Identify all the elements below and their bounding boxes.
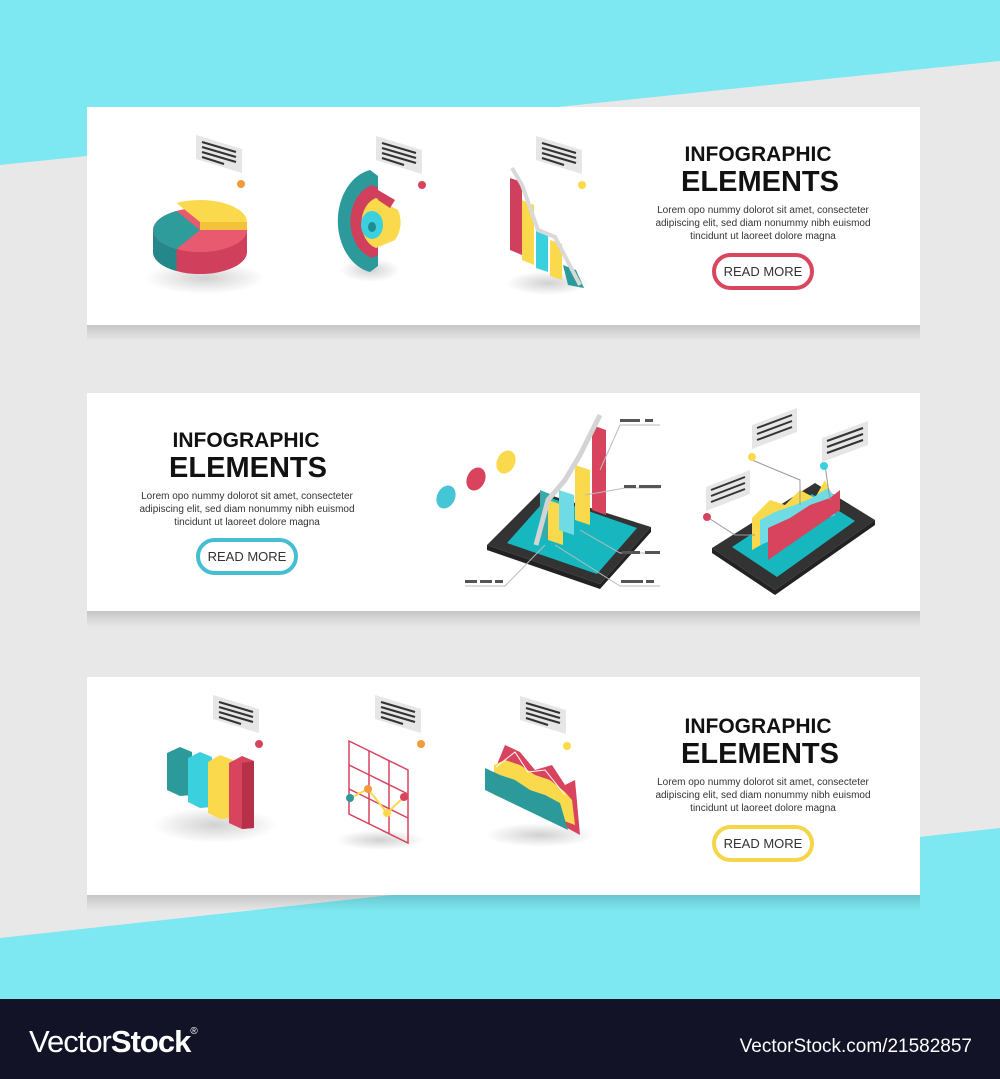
icon: note tablet left (706, 470, 750, 511)
chart: tablet with bar chart (465, 415, 661, 589)
icon: note 2 (376, 136, 422, 174)
text block 1 (655, 205, 871, 242)
title: infographic elements 2: ELEMENTS (169, 452, 327, 484)
title: infographic elements 3: ELEMENTS (681, 738, 839, 770)
text block 3: adipiscing elit, sed diam nonummy nibh euismod (655, 790, 871, 801)
title: infographic elements 2: INFOGRAPHIC (172, 429, 320, 452)
text block 1: tincidunt ut laoreet dolore magna (690, 231, 836, 242)
button: read more yellow: READ MORE (724, 836, 803, 851)
icon: note tablet right (822, 421, 868, 462)
icon: note 5 (375, 695, 421, 733)
title: infographic elements 1: INFOGRAPHIC (684, 143, 832, 166)
text block 2: tincidunt ut laoreet dolore magna (174, 517, 320, 528)
icon: concentric arcs (338, 170, 401, 282)
panel: banner 3 (87, 677, 920, 895)
icon: note 4 (213, 695, 259, 733)
text block 2: adipiscing elit, sed diam nonummy nibh euismod (139, 504, 355, 515)
footer logo: ® (190, 1026, 198, 1037)
icon: note 6 (520, 696, 566, 734)
title: infographic elements 3 (681, 715, 839, 770)
text block 3 (655, 777, 871, 814)
button: read more red (714, 255, 812, 288)
icon: 3d bar blocks (153, 747, 277, 843)
text block 1: Lorem opo nummy dolorot sit amet, consecteter (657, 205, 870, 216)
title: infographic elements 1 (681, 143, 839, 198)
text block 1: adipiscing elit, sed diam nonummy nibh euismod (655, 218, 871, 229)
icon: note 1 (196, 135, 242, 173)
button: read more cyan (198, 540, 296, 573)
title: infographic elements 1: ELEMENTS (681, 166, 839, 198)
button: read more yellow (714, 827, 812, 860)
button: read more cyan: READ MORE (208, 549, 287, 564)
chart: grid line chart (335, 741, 425, 850)
icon: note tablet top (752, 408, 797, 449)
text block 2 (139, 491, 355, 528)
chart: tablet with area chart (703, 453, 875, 595)
title: infographic elements 3: INFOGRAPHIC (684, 715, 832, 738)
panel: banner 2 (87, 393, 920, 611)
icon: note 3 (536, 136, 582, 174)
button: read more red: READ MORE (724, 264, 803, 279)
icon: descending bar chart (506, 168, 590, 295)
chart: layered area chart (485, 745, 595, 847)
footer logo: VectorStock (29, 1024, 190, 1059)
text block 3: tincidunt ut laoreet dolore magna (690, 803, 836, 814)
text block 2: Lorem opo nummy dolorot sit amet, consecteter (141, 491, 354, 502)
icon: colored dots (433, 447, 519, 512)
panel: banner 1 (87, 107, 920, 325)
icon: 3d pie chart (145, 200, 265, 294)
text block 3: Lorem opo nummy dolorot sit amet, consecteter (657, 777, 870, 788)
title: infographic elements 2 (169, 429, 327, 484)
banner shadows (87, 325, 920, 911)
footer url: VectorStock.com/21582857 (740, 1036, 972, 1057)
footer bar (0, 999, 1000, 1079)
